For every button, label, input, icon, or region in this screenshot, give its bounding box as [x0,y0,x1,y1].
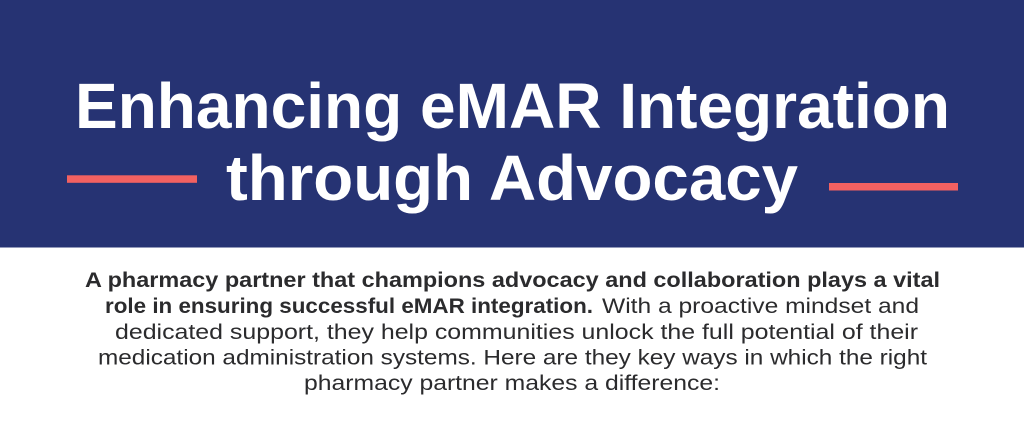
accent line: right [829,183,958,190]
intro text block: medication administration systems. Here are they key ways in which the right [98,346,927,370]
panel: header banner [0,0,1024,248]
intro text block [85,268,940,395]
intro text block: With a proactive mindset and [602,294,919,318]
title: through Advocacy [226,142,798,214]
intro text block: role in ensuring successful eMAR integration. [105,294,593,318]
intro text block: pharmacy partner makes a difference: [304,371,720,395]
title: Enhancing eMAR Integration [75,70,950,142]
title [75,70,950,214]
accent line: left [67,175,197,183]
intro text block: dedicated support, they help communities unlock the full potential of their [115,320,918,344]
intro text block: A pharmacy partner that champions advocacy and collaboration plays a vital [85,268,940,292]
